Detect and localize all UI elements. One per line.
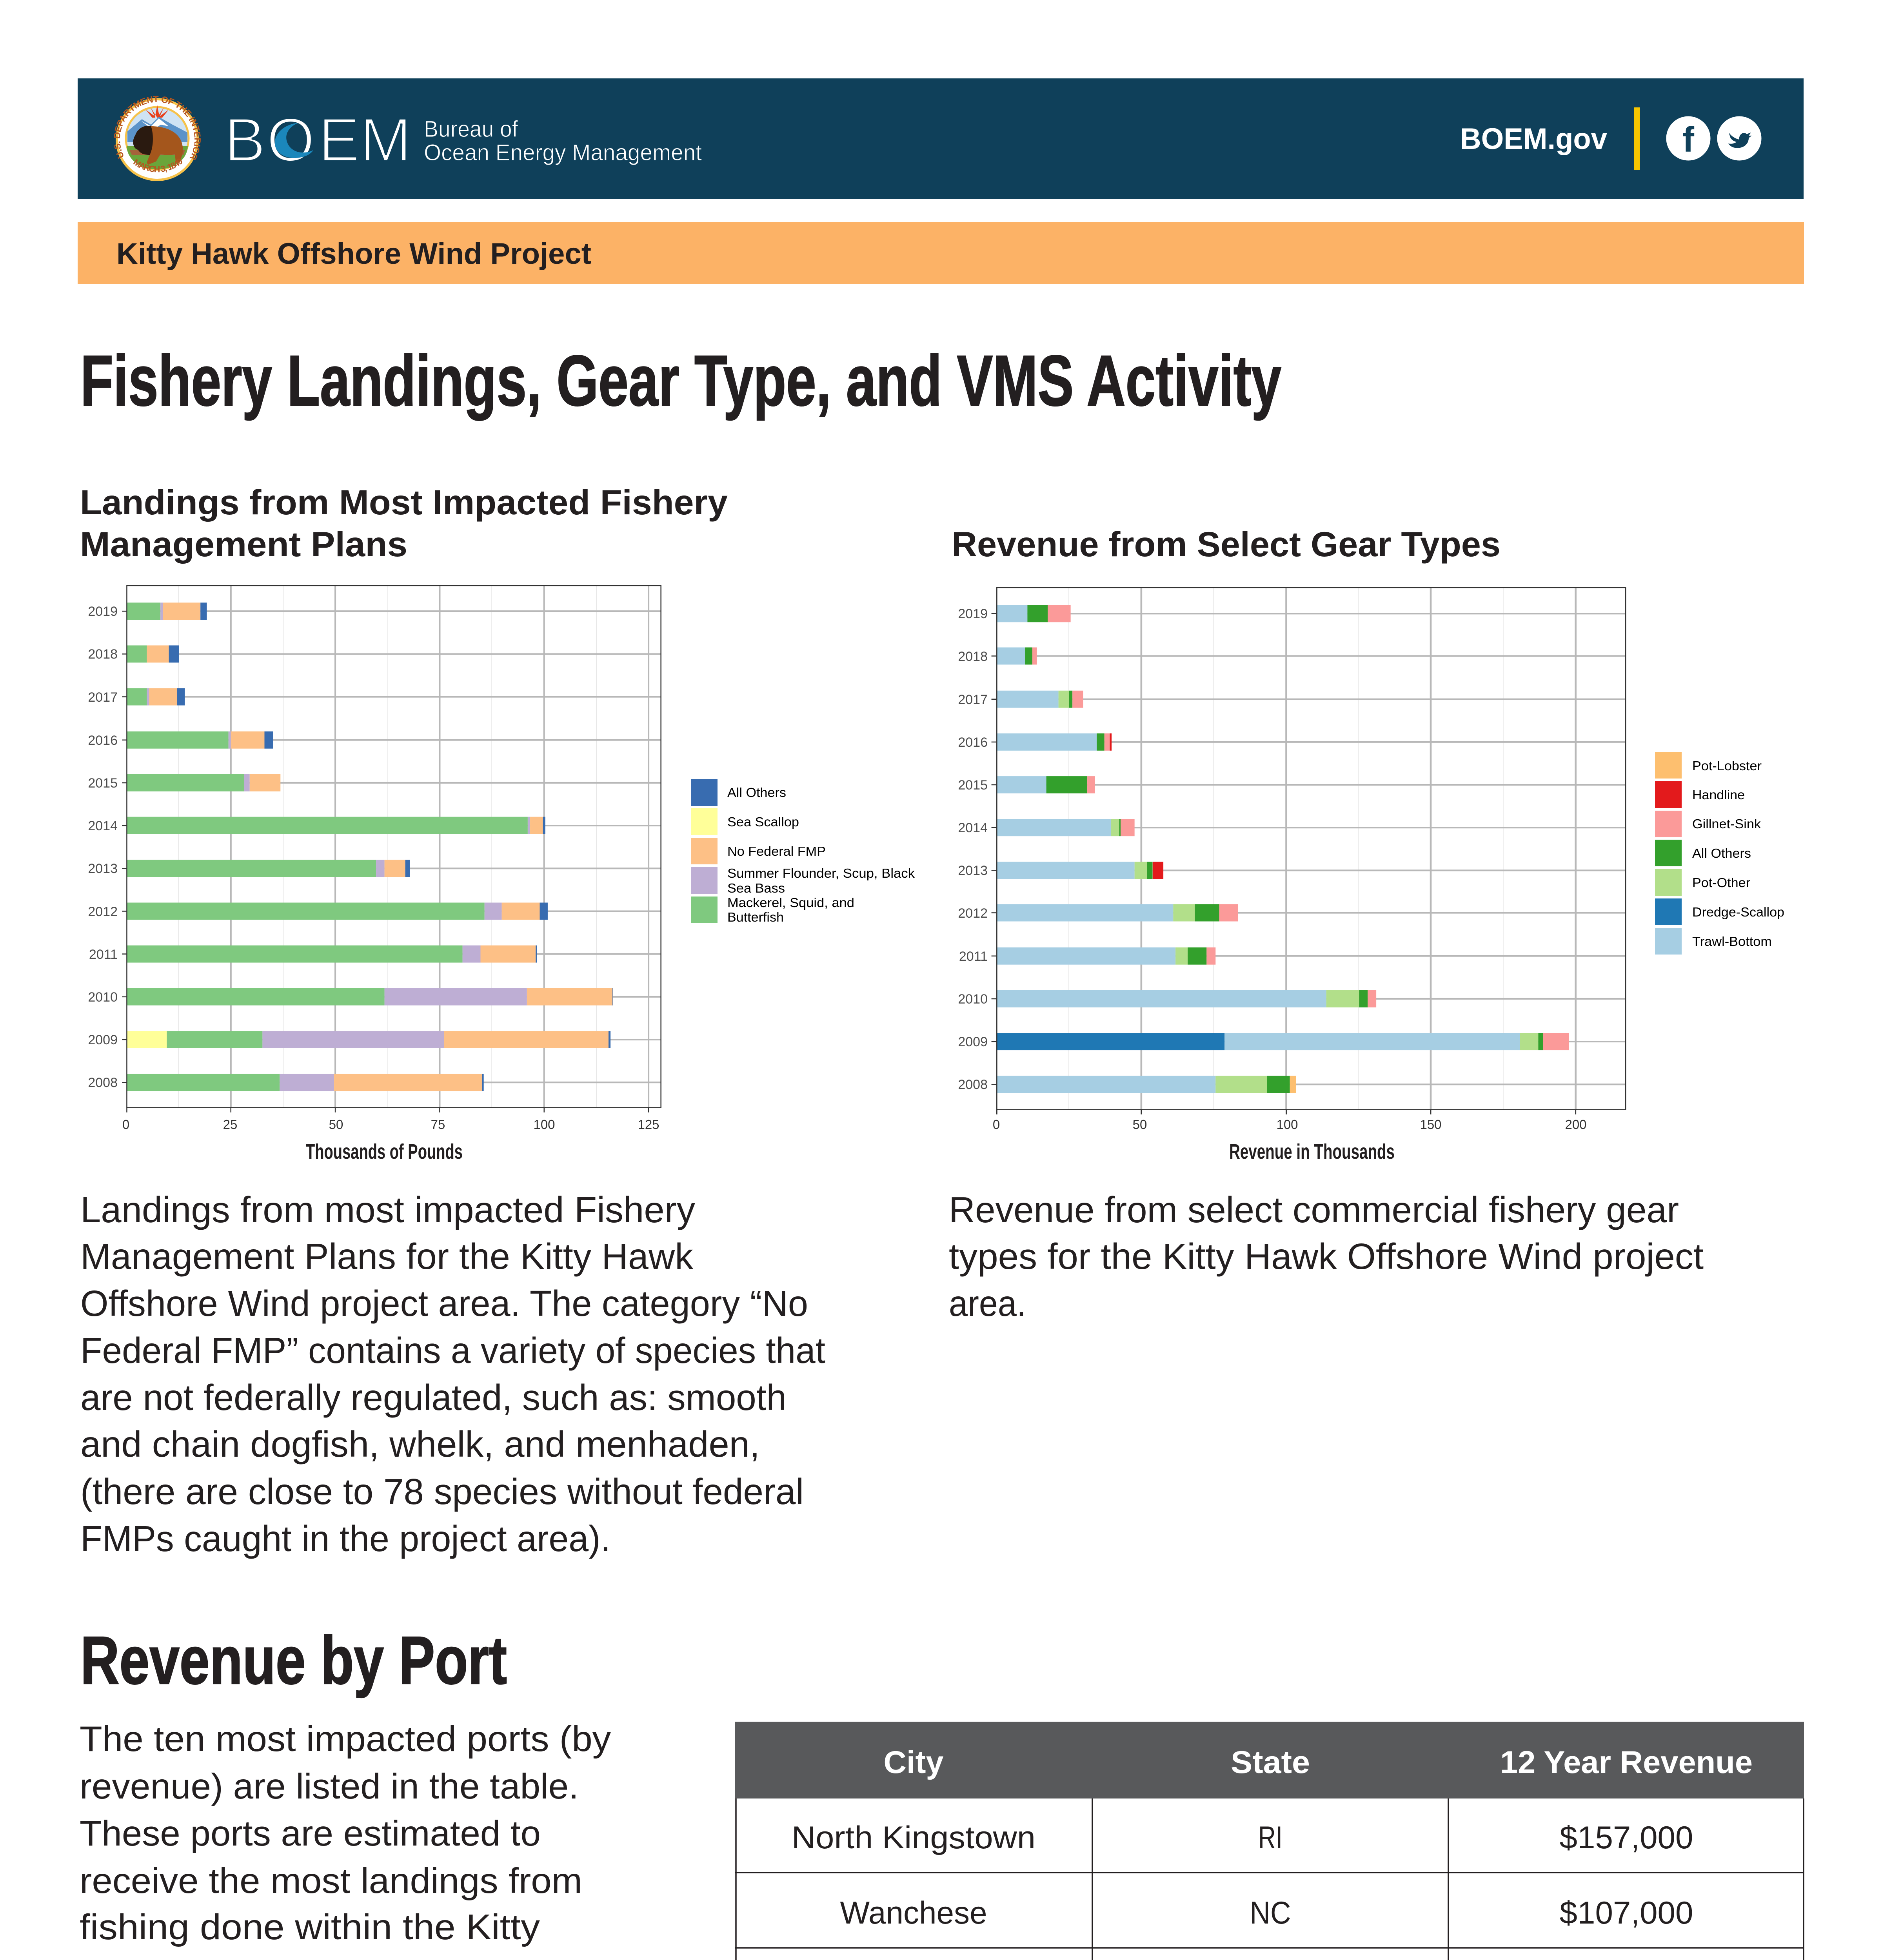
y axis year labels: 2013 <box>958 863 988 878</box>
table header row <box>735 1722 1804 1798</box>
row: Wanchese: $107,000 <box>1560 1895 1693 1931</box>
legend: gear types: Trawl-Bottom <box>1692 934 1772 949</box>
x axis value labels: 125 <box>638 1117 659 1132</box>
y axis year labels: 2010 <box>88 990 118 1005</box>
icon: Department of the Interior seal: MARCH 3, 1849 <box>131 156 185 174</box>
text block: landings description: Federal FMP” contains a variety of species that <box>80 1330 825 1371</box>
project name banner: Kitty Hawk Offshore Wind Project <box>116 237 591 270</box>
text block: landings description: FMPs caught in the project area). <box>80 1518 610 1559</box>
plot grid and bars <box>992 588 1626 1114</box>
x axis value labels: 25 <box>223 1117 237 1132</box>
legend: landings: Summer Flounder, Scup, Black <box>727 866 915 880</box>
y axis year labels: 2012 <box>88 904 118 919</box>
header banner <box>78 78 1804 199</box>
bar: 2013 <box>997 862 1163 879</box>
y axis year labels: 2018 <box>958 649 988 664</box>
yellow divider <box>1634 107 1640 170</box>
y axis year labels: 2012 <box>958 906 988 921</box>
heading: landings chart <box>80 483 728 564</box>
x axis title: Revenue in Thousands <box>1229 1140 1395 1163</box>
text block: landings description: Offshore Wind project area. The category “No <box>80 1283 808 1324</box>
bar: 2012 <box>997 904 1238 922</box>
y axis year labels: 2009 <box>958 1034 988 1049</box>
table header row: State <box>1231 1745 1310 1780</box>
bar: 2011 <box>127 946 537 963</box>
row: North Kingstown <box>792 1820 1693 1855</box>
text block: landings description <box>80 1189 825 1559</box>
y axis year labels: 2019 <box>88 604 118 619</box>
y axis year labels: 2008 <box>958 1077 988 1092</box>
bar: 2019 <box>127 603 207 620</box>
text block: revenue description: Revenue from select commercial fishery gear <box>949 1189 1679 1230</box>
chart: landings stacked bars <box>88 586 915 1163</box>
row: Wanchese: NC <box>1250 1895 1291 1931</box>
legend: gear types: All Others <box>1692 846 1751 860</box>
bar: 2019 <box>997 605 1071 622</box>
x axis value labels: 0 <box>122 1117 129 1132</box>
heading: landings chart: Landings from Most Impacted Fishery <box>80 483 728 522</box>
bar: 2016 <box>997 733 1112 751</box>
y axis year labels: 2009 <box>88 1033 118 1047</box>
x axis value labels: 100 <box>1276 1117 1298 1132</box>
text block: landings description: are not federally regulated, such as: smooth <box>80 1377 787 1418</box>
legend: gear types: Gillnet-Sink <box>1692 817 1761 831</box>
heading: revenue chart: Revenue from Select Gear Types <box>952 524 1501 564</box>
bar: 2011 <box>997 947 1215 965</box>
project name banner <box>78 222 1804 284</box>
legend: gear types: Pot-Lobster <box>1692 759 1762 773</box>
bar: 2014 <box>127 817 545 834</box>
y axis year labels: 2011 <box>959 949 988 964</box>
bar: 2016 <box>127 731 273 749</box>
website link: BOEM.gov <box>1460 122 1607 156</box>
legend: gear types <box>1655 752 1784 955</box>
legend: landings: Sea Scallop <box>727 815 799 829</box>
legend: landings <box>691 779 915 924</box>
x axis title: Thousands of Pounds <box>306 1140 463 1163</box>
text block: revenue description <box>949 1189 1704 1324</box>
bar: 2015 <box>997 776 1095 793</box>
y axis year labels: 2011 <box>89 947 118 962</box>
legend: landings: All Others <box>727 785 786 800</box>
y axis year labels: 2016 <box>958 735 988 750</box>
logo: bureau name: Ocean Energy Management <box>424 140 702 165</box>
row: Wanchese: Wanchese <box>840 1895 987 1931</box>
bar: 2012 <box>127 903 548 920</box>
bar: 2013 <box>127 860 410 877</box>
text block: landings description: and chain dogfish, whelk, and menhaden, <box>80 1424 760 1465</box>
y axis year labels: 2014 <box>88 818 118 833</box>
x axis value labels: 50 <box>329 1117 343 1132</box>
text block: ports description: receive the most landings from <box>80 1861 582 1901</box>
bar: 2015 <box>127 774 280 791</box>
table header row: City <box>884 1745 943 1780</box>
y axis year labels: 2014 <box>958 820 988 835</box>
legend: gear types: Handline <box>1692 788 1745 802</box>
y axis year labels: 2010 <box>958 992 988 1007</box>
text block: landings description: Management Plans for the Kitty Hawk <box>80 1236 693 1277</box>
title: Fishery Landings, Gear Type, and VMS Activity <box>80 340 1281 421</box>
y axis year labels <box>958 606 988 1092</box>
icon: facebook <box>1666 116 1710 161</box>
text block: landings description: Landings from most impacted Fishery <box>80 1189 696 1230</box>
text block: ports description: These ports are estimated to <box>80 1814 541 1853</box>
legend: gear types: Pot-Other <box>1692 875 1750 890</box>
x axis value labels <box>993 1117 1587 1132</box>
row: North Kingstown: North Kingstown <box>792 1820 1035 1855</box>
logo: bureau name: Bureau of <box>424 116 518 142</box>
text block: revenue description: area. <box>949 1283 1026 1324</box>
bar: 2008 <box>127 1074 484 1091</box>
bar: 2010 <box>127 988 613 1005</box>
y axis year labels: 2015 <box>88 776 118 791</box>
x axis value labels: 100 <box>533 1117 555 1132</box>
icon: facebook: f <box>1682 120 1695 160</box>
legend: landings: Mackerel, Squid, and <box>727 895 854 910</box>
heading: revenue by port: Revenue by Port <box>80 1622 507 1698</box>
y axis year labels: 2019 <box>958 606 988 621</box>
text block: ports description: revenue) are listed in the table. <box>80 1767 579 1806</box>
y axis year labels: 2013 <box>88 861 118 876</box>
bar: 2008 <box>997 1076 1296 1093</box>
chart: revenue stacked bars <box>958 588 1784 1163</box>
y axis year labels: 2015 <box>958 778 988 793</box>
text block: ports description <box>80 1719 632 1960</box>
y axis year labels: 2017 <box>958 692 988 707</box>
y axis year labels: 2008 <box>88 1075 118 1090</box>
heading: landings chart: Management Plans <box>80 524 407 564</box>
bar: 2018 <box>997 648 1037 664</box>
bar: 2009 <box>997 1033 1569 1050</box>
table: port revenue <box>735 1722 1804 1960</box>
plot grid and bars <box>122 586 661 1112</box>
row: North Kingstown: RI <box>1258 1820 1283 1855</box>
row: North Kingstown: $157,000 <box>1560 1820 1693 1855</box>
logo: BOEM wordmark: BOEM <box>224 105 412 174</box>
x axis value labels: 75 <box>431 1117 445 1132</box>
y axis year labels: 2017 <box>88 690 118 705</box>
bar: 2017 <box>997 691 1083 708</box>
y axis year labels <box>88 604 118 1090</box>
y axis year labels: 2016 <box>88 733 118 748</box>
legend: landings: No Federal FMP <box>727 844 826 858</box>
text block: revenue description: types for the Kitty Hawk Offshore Wind project <box>949 1236 1704 1277</box>
x axis value labels: 200 <box>1565 1117 1587 1132</box>
legend: landings: Butterfish <box>727 910 784 924</box>
icon: twitter <box>1717 116 1761 161</box>
x axis value labels: 0 <box>993 1117 1000 1132</box>
x axis value labels <box>122 1117 659 1132</box>
bar: 2014 <box>997 819 1135 836</box>
text block: ports description: The ten most impacted ports (by <box>80 1719 611 1759</box>
x axis value labels: 50 <box>1133 1117 1147 1132</box>
text block: landings description: (there are close to 78 species without federal <box>80 1471 804 1512</box>
row: Wanchese <box>840 1895 1693 1931</box>
y axis year labels: 2018 <box>88 647 118 662</box>
logo: bureau name <box>424 116 702 165</box>
bar: 2018 <box>127 645 179 662</box>
bar: 2009 <box>127 1031 610 1048</box>
legend: gear types: Dredge-Scallop <box>1692 905 1784 919</box>
bar: 2017 <box>127 688 185 705</box>
x axis value labels: 150 <box>1420 1117 1442 1132</box>
icon: Department of the Interior seal: U.S. DEPARTMENT OF THE INTERIOR <box>112 94 203 162</box>
legend: landings: Sea Bass <box>727 881 785 895</box>
table header row: 12 Year Revenue <box>1500 1745 1753 1780</box>
bar: 2010 <box>997 990 1376 1007</box>
text block: ports description: fishing done within the Kitty <box>80 1907 540 1947</box>
